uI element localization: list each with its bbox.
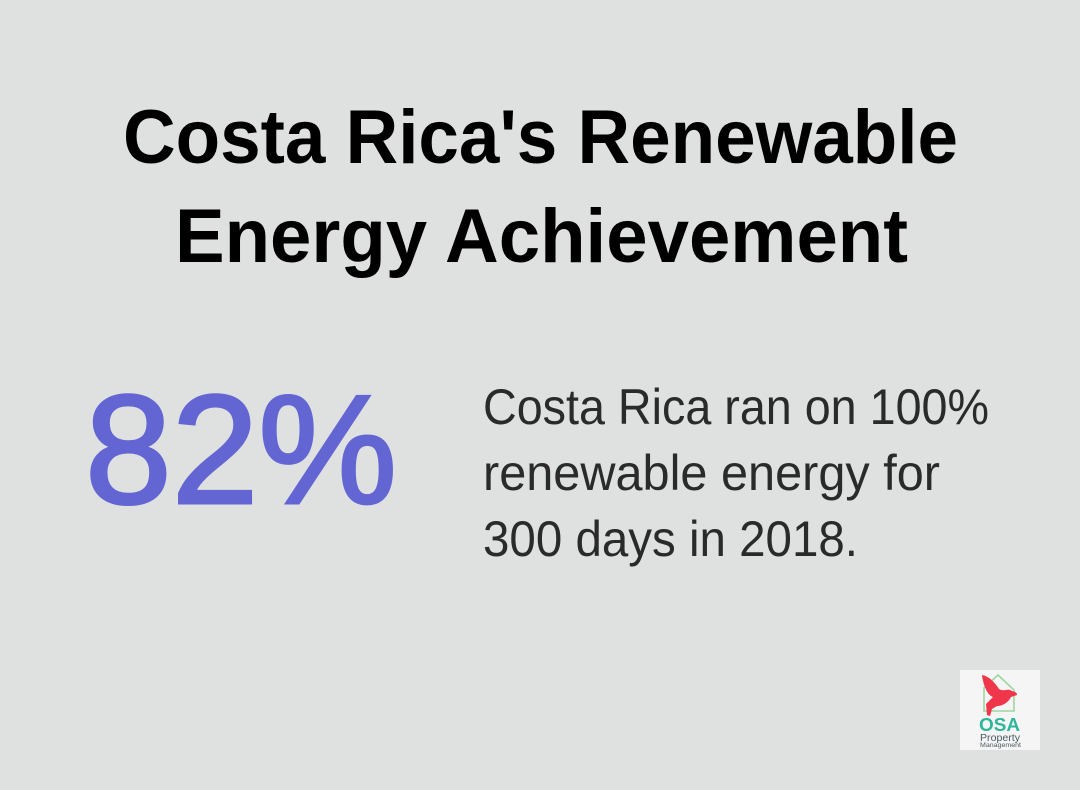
description text: [483, 379, 989, 567]
description text: Costa Rica ran on 100%: [483, 379, 989, 435]
icon: house outline: [984, 675, 1014, 711]
logo: OSA Property Management: Property: [980, 733, 1020, 744]
icon: red bird: [982, 675, 1017, 716]
title: Costa Rica's Renewable: [123, 95, 958, 180]
statistic: 82%: 82%: [85, 363, 397, 536]
title: Energy Achievement: [175, 194, 908, 279]
description text: 300 days in 2018.: [483, 511, 858, 567]
title: [123, 95, 958, 279]
logo wordmark: OSA: [979, 715, 1020, 735]
logo: OSA Property Management: Management: [980, 743, 1021, 749]
logo: OSA Property Management: [960, 670, 1040, 750]
description text: renewable energy for: [483, 445, 940, 501]
